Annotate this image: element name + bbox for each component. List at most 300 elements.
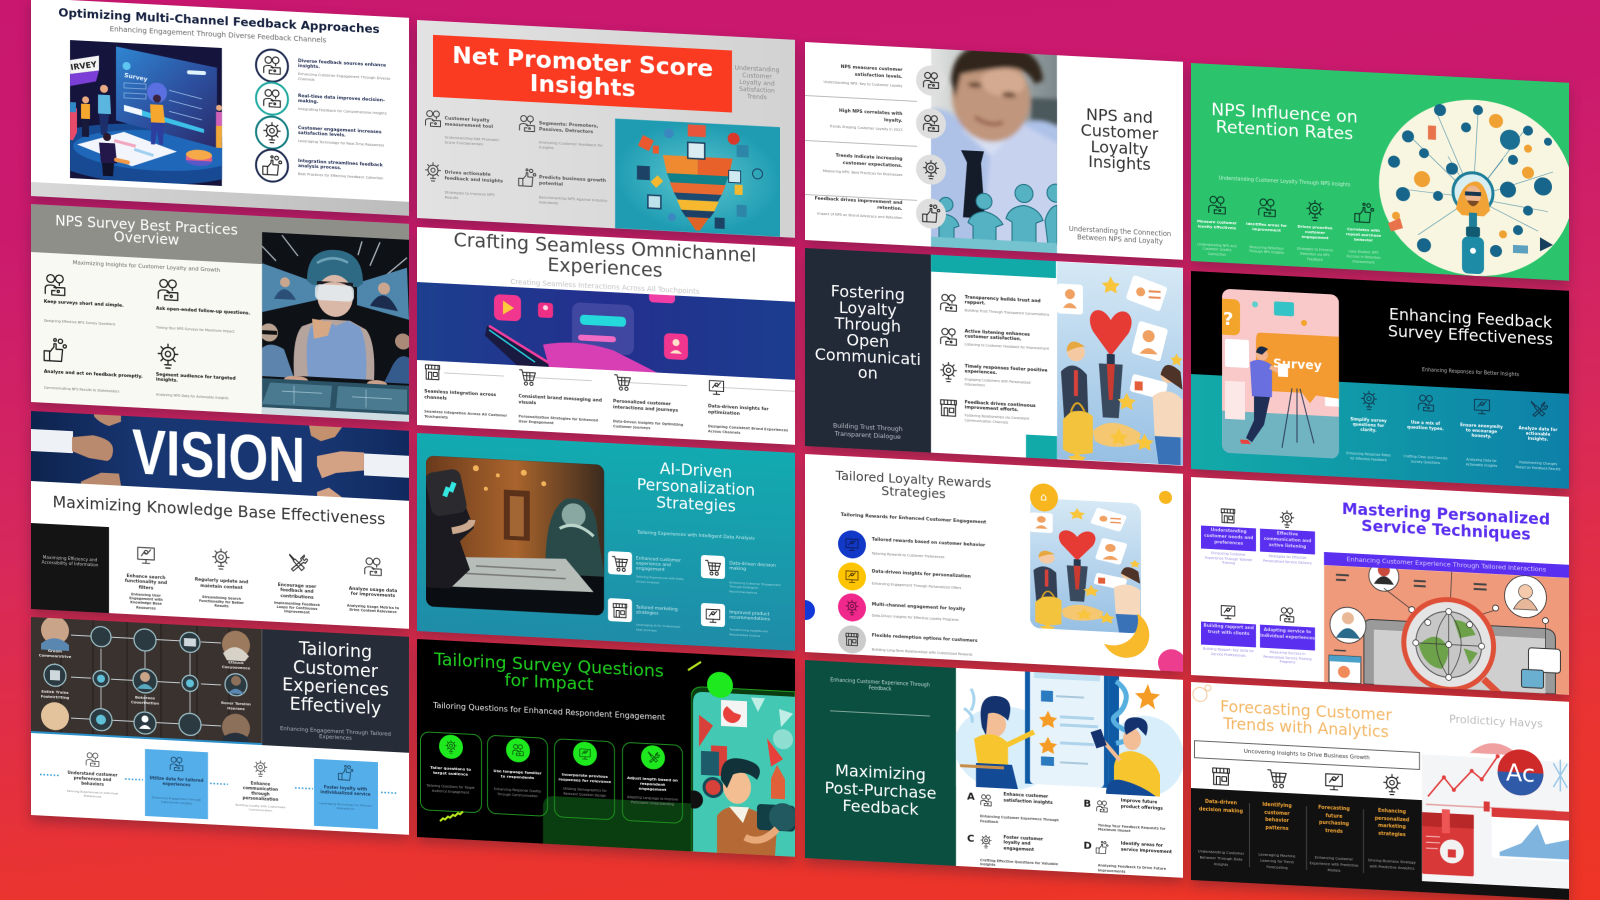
title [1372, 305, 1569, 349]
title: Mastering Personalized [1342, 499, 1550, 529]
step 1: Understand customer preferences and behaviors [67, 770, 117, 787]
title: Tailoring Survey Questions [434, 650, 664, 682]
column 2: Identifying customer behavior patterns [1263, 803, 1292, 832]
icon: people [938, 326, 959, 348]
illustration: survey screen with people: IRVEY [70, 60, 97, 72]
pink circle [1158, 648, 1186, 678]
icon: gear [938, 361, 959, 383]
icon: gear [157, 343, 178, 370]
step 2: Utilize data for tailored experiences [149, 775, 203, 788]
item 2 note: Crafting Clear and Concise Survey Questions [1404, 454, 1448, 465]
item 3 [636, 605, 688, 634]
panel: NPS Influence on Retention Rates [1191, 63, 1569, 281]
column 1: Enhance search functionality and filters [124, 574, 167, 591]
title: Through [834, 314, 901, 336]
panel: Forecasting Customer Trends with Analytics [1191, 682, 1569, 900]
point 3 [964, 364, 1050, 392]
illustration: loyalty scene with heart [1056, 261, 1183, 466]
icon: presentation [135, 543, 157, 567]
column 4: Analyze usage data for improvements [348, 586, 397, 599]
panel: Tailoring Customer Experiences Effectively [31, 617, 409, 835]
card 1 [1201, 525, 1256, 551]
photo: man with paper figures [930, 48, 1058, 254]
card 4: Adjust length based on respondent engagement [627, 775, 678, 792]
reward 1: Tailored rewards based on customer behavior [871, 538, 985, 548]
subtitle: Understanding the Connection Between NPS and Loyalty [1068, 225, 1171, 245]
item 3 [1296, 224, 1334, 262]
column 1 note: Understanding Customer Behavior Through Data Insights [1198, 849, 1244, 866]
point 1 [444, 116, 499, 146]
title: Loyalty [838, 298, 896, 320]
icon: gear [252, 760, 269, 777]
card 1: Tailor questions to target audience [431, 764, 471, 776]
title: Communicati [814, 345, 920, 369]
icon: person [1416, 393, 1436, 414]
divider line [830, 710, 930, 717]
card 4: Adapting Language to Improve Participant Understanding [627, 795, 678, 806]
item C note: Crafting Effective Questions for Valuable Insights [980, 858, 1058, 867]
yellow crescent [1101, 610, 1151, 662]
title: on [857, 363, 877, 383]
icon: documents [1210, 765, 1232, 788]
column 2: Personalization Strategies for Enhanced User Engagement [519, 415, 598, 425]
title [1323, 500, 1569, 545]
icon circle 4 [915, 198, 945, 230]
illustration heading: Proldicticy Havys [1449, 713, 1543, 730]
item C: Foster customer loyalty and engagement [1003, 835, 1043, 852]
illustration: man at Survey easel: Survey [1273, 355, 1322, 373]
title [417, 228, 793, 288]
column 2 note: Leveraging Machine Learning for Trend Forecasting [1259, 852, 1296, 870]
subtitle: Enhancing Responses for Better Insights [1422, 368, 1519, 378]
icon: hand [518, 168, 536, 187]
black side block [31, 523, 109, 613]
point 4: Feedback drives improvement and retention. [814, 196, 902, 212]
panel: Mastering Personalized Service Techniques [1191, 477, 1569, 695]
item 1 [43, 299, 124, 327]
title: Strategies [881, 483, 945, 502]
illustration: man at Survey easel [1222, 289, 1339, 459]
left column [805, 660, 956, 866]
card 4: Adapting service to individual experiences [1260, 628, 1315, 641]
item 1: Measure customer loyalty effectively [1197, 218, 1237, 230]
illustration: analytics chart with lock and Ac badge: Ac [1506, 759, 1535, 788]
title: NPS Survey Best Practices [55, 213, 237, 238]
icon: person [1278, 606, 1296, 625]
panel: Tailored Loyalty Rewards Strategies [805, 454, 1183, 672]
panel: Maximizing Post-Purchase Feedback [805, 660, 1183, 878]
step 4 [318, 784, 373, 812]
item 1: Enhanced customer experience and engagement [636, 556, 681, 573]
item 1 [636, 556, 688, 587]
item 1: Keep surveys short and simple. [43, 300, 123, 309]
point 1 [823, 64, 903, 88]
item 4 note: Implementing Changes Based on Feedback Results [1516, 460, 1561, 471]
point 4: Feedback drives continuous improvement efforts. [964, 400, 1035, 414]
panel: NPS Survey Best Practices Overview [31, 204, 409, 422]
item 4 [730, 610, 785, 639]
item 4: Case Studies: NPS Success in Retention Improvement [1347, 250, 1381, 265]
icon: bulb [1278, 510, 1296, 529]
column 2: Regularly update and maintain content [194, 578, 248, 591]
title: Customer [1080, 120, 1158, 143]
illustration: people network on wood wall [31, 617, 262, 745]
title [805, 282, 930, 385]
illustration: magnifier over globe [1324, 565, 1569, 695]
item 1 note: Enhancing Response Rates for Effective Feedback [1347, 451, 1391, 462]
column 3: Implementing Feedback Loops for Continuous Improvement [274, 601, 320, 615]
title banner: Insights [530, 69, 636, 102]
title: Experiences [282, 675, 388, 701]
icon: gear [1306, 200, 1324, 222]
point 2: Segments: Promoters, Passives, Detractors [539, 121, 599, 135]
icon tile: cart [608, 551, 632, 575]
icon: gear [1381, 773, 1403, 796]
icon: store [423, 362, 442, 382]
column 3 [271, 582, 323, 616]
column 3: Forecasting future purchasing trends [1318, 806, 1350, 834]
point 1: Understanding NPS: Key to Customer Loyalty [823, 79, 902, 88]
item 4: Segment audience for targeted insights. [156, 373, 235, 384]
icon: people [1258, 198, 1276, 218]
item 3: Analyze and act on feedback promptly. [43, 369, 142, 379]
point 3: Drives actionable feedback and insights [445, 170, 503, 184]
icon: gear [425, 162, 441, 182]
dark green background shape [543, 796, 693, 851]
item 2: Enhancing Customer Engagement Through Intelligent Recommendations [730, 580, 781, 594]
point 4: Integration streamlines feedback analysis process. [298, 159, 382, 172]
point 1: Understanding Net Promoter Score Fundamentals [445, 135, 499, 146]
title: Tailoring [298, 639, 372, 663]
icon: people [168, 755, 185, 773]
point 1 [964, 295, 1050, 318]
point 1: Transparency builds trust and rapport. [964, 295, 1040, 307]
step 3: Enhance communication through personalization [242, 780, 278, 802]
subtitle: Enhancing Customer Experience Through Feedback [830, 678, 929, 692]
card 3 [555, 738, 616, 820]
squiggle accent upper right [687, 659, 703, 673]
dotted connectors [31, 771, 409, 797]
illustration: people network on wood wall: Coeyoovence [221, 664, 250, 671]
item 2 [1246, 221, 1287, 255]
icon: people [1208, 196, 1226, 215]
card 2 [487, 734, 548, 817]
reward 4 [871, 634, 1001, 658]
squiggle accent lower left [439, 808, 467, 824]
icon: people [1095, 799, 1109, 814]
teal accent bottom [1026, 435, 1056, 459]
point 2 [829, 108, 902, 132]
item D: Identify areas for service improvement [1120, 842, 1172, 855]
title [1191, 697, 1421, 742]
item 4: Correlates with repeat purchase behavior [1346, 226, 1381, 242]
panel: AI-Driven Personalization Strategies [417, 433, 795, 651]
card 4 [622, 741, 683, 824]
icon: balance [362, 555, 384, 578]
badge yellow [838, 561, 866, 591]
reward 3: Multi-channel engagement for loyalty [871, 603, 965, 612]
column 3 note: Enhancing Customer Experience with Predictive Models [1310, 855, 1359, 872]
point 2 [964, 329, 1050, 352]
step 3: Building Loyalty with Customized Communication [235, 803, 285, 813]
step 1: Tailoring Experiences to Individual Preferences [66, 788, 118, 798]
item 3: Communicating NPS Results to Stakeholders [43, 386, 119, 394]
badge pink [838, 593, 866, 622]
panel: NPS and Customer Loyalty Insights [805, 42, 1183, 260]
title banner [434, 34, 732, 112]
step 2 [149, 775, 204, 806]
title: Retention Rates [1216, 117, 1354, 144]
column 4: Enhancing personalized marketing strategies [1375, 809, 1410, 838]
item 2: Measuring Retention Through NPS Insights [1249, 245, 1284, 255]
subtitle: Tailoring Experiences with Intelligent Data Analysis [638, 531, 755, 542]
item ring 3 [255, 115, 289, 151]
item 1: Understanding NPS and Customer Loyalty Connection [1198, 242, 1237, 257]
icon: presentation [1219, 602, 1237, 621]
point 1: Diverse feedback sources enhance insights. [298, 59, 386, 71]
card 4 [1260, 625, 1315, 651]
point 1: NPS measures customer satisfaction levels. [840, 65, 902, 80]
item 1: Designing Effective NPS Survey Questions [43, 319, 115, 327]
icon circle 1 [915, 65, 945, 97]
point 1: Enhancing Customer Engagement Through Diverse Channels [298, 72, 390, 81]
illustration: neon app screen [417, 282, 795, 380]
title [805, 760, 956, 820]
icon: store [1219, 506, 1237, 525]
card 1 [420, 731, 482, 813]
photo: woman with visor at table [262, 232, 409, 422]
item 4: Analyzing NPS Data for Actionable Insights [156, 392, 228, 400]
panel: Net Promoter Score Insights [417, 20, 795, 238]
icon tile: cart [701, 555, 725, 579]
title [417, 651, 681, 698]
column 4 [346, 586, 400, 614]
photo: VISION banner with hands [31, 411, 409, 501]
card 1: Tailoring Questions for Target Audience Engagement [427, 783, 475, 794]
point 3 [444, 170, 503, 200]
icon: notebook [1266, 767, 1288, 790]
column 4: Designing Consistent Brand Experiences Across Channels [708, 425, 788, 435]
title: Survey Effectiveness [1388, 321, 1553, 348]
card 1: Understanding customer needs and preferences [1204, 528, 1254, 547]
reward 1: Tailoring Rewards to Customer Preferences [871, 551, 944, 559]
reward 2 [871, 569, 1001, 593]
item 2: Ask open-ended follow-up questions. [156, 306, 250, 316]
dark title panel [262, 629, 409, 753]
icon: people [157, 278, 179, 302]
column 2 [519, 394, 603, 428]
card note 4: Measuring Success in Personalized Service Training Programs [1264, 650, 1312, 664]
title: Open [846, 330, 889, 351]
title: Customer [293, 657, 378, 682]
point 4: Best Practices for Effective Feedback Collection [298, 172, 383, 181]
badge top circle: ⌂ [1040, 490, 1047, 503]
title: Forecasting Customer [1220, 697, 1392, 725]
icon circle 3 [915, 153, 945, 185]
point 4: Benchmarking NPS Against Industry Standards [539, 195, 608, 205]
icon circle 2 [915, 107, 945, 139]
illustration: people network on wood wall: Groom [48, 648, 62, 654]
point 2: Listening to Customer Feedback for Improvement [964, 343, 1049, 351]
card 3: Building rapport and trust with clients [1204, 624, 1254, 637]
title: Post-Purchase [824, 778, 936, 802]
column 1 [424, 389, 508, 423]
title: Service Techniques [1362, 516, 1531, 544]
blue card 1 [144, 748, 208, 819]
illustration: people network on wood wall: Rover Toroinn [221, 700, 251, 707]
title [805, 467, 1022, 505]
icon: people [425, 110, 442, 128]
icon: people [979, 793, 993, 808]
icon: store [938, 397, 959, 419]
icon: process [210, 547, 232, 571]
card 2: Effective communication and active listening [1264, 532, 1312, 550]
point 3: Customer engagement increases satisfaction levels. [298, 126, 381, 139]
connector lines [444, 372, 795, 392]
point 3: Measuring NPS: Best Practices for Businesses [822, 168, 902, 177]
title: Crafting Seamless Omnichannel [454, 229, 757, 267]
icon: hand [1354, 202, 1374, 224]
item ring 4 [255, 148, 289, 184]
step 4: Leveraging Technology for Tailored Interactions [319, 801, 371, 811]
icon: hand [1095, 840, 1109, 855]
column 3 [613, 399, 697, 433]
item 3: Tailored marketing strategies [636, 605, 678, 616]
point 1: Customer loyalty measurement tool [445, 116, 493, 130]
subtitle: Enhancing Engagement Through Tailored Experiences [280, 726, 391, 741]
decorative bubbles [1191, 682, 1215, 707]
column 1 [120, 573, 172, 611]
subtitle: Enhancing Engagement Through Diverse Feedback Channels [109, 24, 326, 44]
item 3: Ensure anonymity to encourage honesty. [1460, 422, 1503, 439]
item 2: Use a mix of question types. [1407, 420, 1444, 431]
icon: people [938, 292, 959, 314]
item 1: Tailoring Experiences with Data-Driven Analysis [636, 575, 685, 585]
column 1: Enhancing User Engagement with Knowledge Base Resources [129, 592, 162, 610]
point 2: Active listening enhances customer satisfaction. [964, 329, 1029, 343]
item 3 note: Analyzing Data for Actionable Insights [1466, 457, 1497, 468]
subtitle: Tailoring Rewards for Enhanced Customer Engagement [840, 512, 986, 525]
badge blue [838, 529, 866, 559]
step 1 [65, 770, 120, 799]
title: Tailored Loyalty Rewards [835, 468, 991, 491]
point 2: High NPS correlates with loyalty. [839, 109, 902, 124]
icon: people [518, 115, 536, 132]
icon: people [84, 751, 101, 769]
panel: Optimizing Multi-Channel Feedback Approaches [31, 0, 409, 216]
illustration: people network circle [1378, 100, 1569, 276]
point 3: Trends indicate increasing customer expectations. [835, 154, 902, 169]
card 3: Utilizing Demographics for Relevant Question Design [563, 786, 607, 797]
illustration: people network on wood wall: Fosteirtriting [40, 694, 69, 700]
icon tile: store [608, 598, 632, 622]
point 4: Predicts business growth potential [539, 175, 606, 187]
card note 2: Strategies for Effective Personalized Service Delivery [1263, 554, 1312, 565]
reward 3: Data-Driven Insights for Effective Loyalty Programs [871, 614, 958, 622]
badge top circle [1029, 483, 1057, 512]
point 3: Leveraging Technology for Real-Time Responses [298, 139, 384, 148]
item 2: Identifies areas for improvement [1246, 221, 1287, 233]
icon: cart [518, 367, 537, 387]
black strip right [1421, 881, 1569, 900]
panel: Fostering Loyalty Through Open Communication [805, 248, 1183, 466]
step 4: Foster loyalty with individualized service [320, 784, 370, 796]
card 2: Enhancing Response Quality Through Communication [494, 787, 541, 798]
subtitle: Maximizing Insights for Customer Loyalty and Growth [72, 260, 220, 274]
icon: cart [613, 372, 632, 392]
item 4: Transforming Insights into Personalized Actions [730, 627, 769, 638]
reward 4: Building Long-Term Relationships with Customized Rewards [871, 647, 972, 657]
illustration: people network on wood wall: Bokaroos [135, 694, 155, 701]
item 3: Leveraging AI for Customized User Journeys [636, 623, 681, 632]
icon: anonymous screen [1472, 396, 1492, 417]
illustration: funnel [614, 118, 780, 237]
point 2: Real-time data improves decision-making. [298, 94, 384, 105]
column 4: Data-driven insights for optimization [708, 404, 769, 417]
item D note: Analyzing Feedback to Drive Future Improvements [1097, 863, 1166, 873]
subtitle: Tailoring Questions for Enhanced Respondent Engagement [433, 701, 665, 722]
item 1 [1197, 218, 1237, 257]
point 1 [298, 58, 390, 81]
column 3: Data-Driven Insights for Optimizing Customer Journeys [613, 420, 684, 430]
icon: growth [1528, 399, 1548, 420]
left title column [805, 248, 930, 453]
step 2: Enhancing Engagement Through Data-Driven Insights [151, 796, 201, 806]
point 2 [298, 94, 386, 116]
title: Personalization [637, 476, 755, 500]
yellow dot [1159, 490, 1172, 504]
column 2 [194, 578, 249, 610]
heading band [31, 204, 409, 271]
step 3 [233, 779, 288, 814]
point 4 [814, 196, 902, 220]
subtitle: Building Trust Through [833, 422, 902, 433]
column 1: Data-driven decision making [1199, 800, 1243, 814]
column 2: Consistent brand messaging and visuals [519, 394, 602, 406]
item 2: Timing Your NPS Surveys for Maximum Impact [156, 325, 234, 334]
illustration: robot at workshop [426, 455, 605, 616]
panel: Enhancing Feedback Survey Effectiveness [1191, 271, 1569, 489]
column 1: Seamless integration across channels [424, 389, 496, 401]
badge gray [838, 625, 866, 654]
point 3: Strategies to Improve NPS Results [445, 190, 495, 200]
point 4: Impact of NPS on Brand Advocacy and Retention [817, 212, 902, 220]
subtitle box: Uncovering Insights to Drive Business Growth [1244, 749, 1370, 761]
title: Insights [1088, 152, 1150, 175]
point 4 [298, 158, 384, 181]
icon tile: monitor [701, 603, 725, 627]
title [1212, 100, 1358, 144]
item 4: Analyze data for actionable insights. [1519, 425, 1558, 442]
title: Overview [113, 229, 179, 249]
item B: Improve future product offerings [1120, 799, 1162, 811]
title [606, 458, 786, 519]
illustration: rewards card [1030, 498, 1141, 634]
illustration: people network on wood wall: Commoarstrive [38, 652, 71, 659]
subtitle: Understanding Customer Loyalty and Satisfaction Trends [735, 65, 780, 101]
title: Feedback [842, 796, 918, 819]
icon: dollars [1359, 390, 1379, 411]
title [1080, 105, 1158, 175]
reward 4: Flexible redemption options for customers [871, 634, 977, 644]
illustration: man at Survey easel: ? [1223, 309, 1234, 330]
title: Effectively [289, 694, 381, 719]
side block text: Maximizing Efficiency and Accessibility of Information [41, 555, 98, 568]
card 2 [1260, 528, 1315, 554]
illustration: survey screen with people: Survey [123, 72, 148, 83]
letter C: C [967, 833, 974, 845]
blue half-circle accent [795, 599, 815, 621]
